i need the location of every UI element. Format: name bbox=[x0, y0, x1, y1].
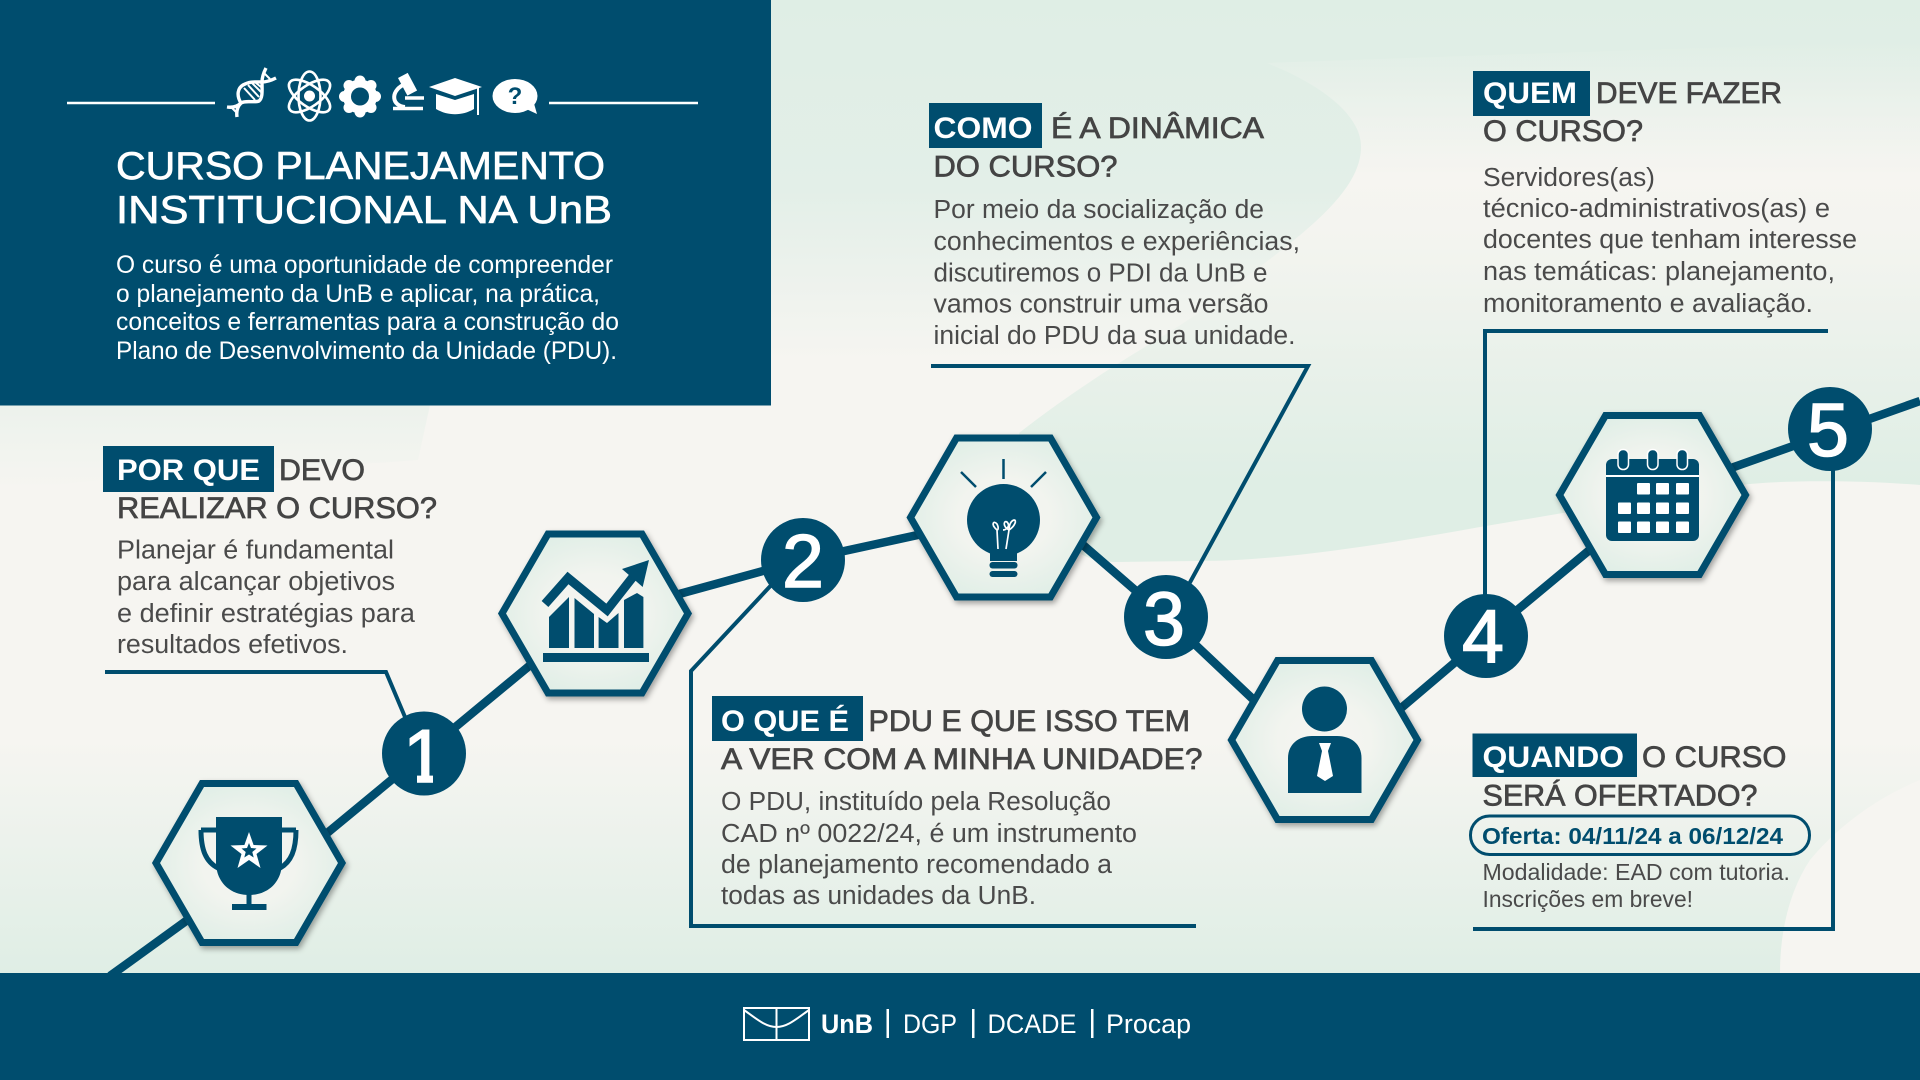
body: o que e: todas as unidades da UnB. bbox=[721, 882, 1036, 910]
connector: step 1 bbox=[105, 672, 405, 717]
body: quem bbox=[1483, 164, 1857, 318]
body: como: inicial do PDU da sua unidade. bbox=[934, 322, 1296, 350]
icon: dna bbox=[227, 68, 276, 117]
section: quem bbox=[1473, 71, 1857, 318]
heading: quem: O CURSO? bbox=[1483, 115, 1643, 148]
body: quem: nas temáticas: planejamento, bbox=[1483, 258, 1835, 286]
header rule left bbox=[67, 102, 215, 104]
icon: trophy bbox=[201, 817, 296, 910]
icon: microscope bbox=[393, 73, 424, 108]
number badge 1: 1 bbox=[403, 714, 445, 798]
body: quem: docentes que tenham interesse bbox=[1483, 226, 1857, 254]
icon: growth chart bbox=[543, 560, 649, 662]
header rule right bbox=[549, 102, 698, 104]
intro text: conceitos e ferramentas para a construção do bbox=[116, 308, 619, 336]
icon: gear bbox=[339, 76, 381, 118]
section: como bbox=[929, 103, 1300, 350]
icon: question bubble: ? bbox=[508, 83, 522, 110]
hexagon: trophy bbox=[156, 784, 342, 942]
body: como: discutiremos o PDI da UnB e bbox=[934, 260, 1268, 288]
date pill: Oferta: 04/11/24 a 06/12/24 bbox=[1482, 823, 1783, 849]
heading: quem bbox=[1473, 71, 1782, 148]
date pill bbox=[1470, 816, 1810, 854]
body: quando bbox=[1482, 859, 1790, 912]
footer text: Procap bbox=[1106, 1009, 1191, 1039]
connector: step 4 bbox=[1485, 331, 1828, 600]
heading: o que e: PDU E QUE ISSO TEM bbox=[868, 705, 1190, 738]
timeline path bbox=[110, 401, 1920, 976]
number badge 4 bbox=[1444, 594, 1528, 678]
number badge 4: 4 bbox=[1462, 594, 1504, 678]
connector: step 5 bbox=[1473, 470, 1833, 929]
hexagon: person bbox=[1232, 660, 1418, 820]
body: o que e: CAD nº 0022/24, é um instrumento bbox=[721, 820, 1137, 848]
number badge 2 bbox=[761, 518, 845, 603]
number badge 3: 3 bbox=[1143, 577, 1185, 661]
number badge 5: 5 bbox=[1807, 388, 1849, 472]
intro text bbox=[116, 251, 619, 365]
heading: quando: SERÁ OFERTADO? bbox=[1482, 780, 1758, 812]
heading: o que e: O QUE É bbox=[721, 704, 849, 738]
footer text: UnB bbox=[821, 1009, 873, 1039]
title: INSTITUCIONAL NA UnB bbox=[116, 189, 612, 232]
footer text: DGP bbox=[903, 1009, 957, 1039]
title: CURSO PLANEJAMENTO bbox=[116, 145, 605, 188]
body: por que: e definir estratégias para bbox=[117, 600, 416, 628]
body: como: conhecimentos e experiências, bbox=[934, 228, 1300, 256]
heading: quando bbox=[1472, 734, 1786, 812]
footer text: DCADE bbox=[988, 1009, 1076, 1039]
heading: por que bbox=[103, 446, 437, 525]
footer bbox=[0, 973, 1920, 1080]
body: como: Por meio da socialização de bbox=[934, 196, 1264, 224]
body: por que: resultados efetivos. bbox=[117, 631, 348, 659]
number badge 2: 2 bbox=[782, 519, 824, 603]
number badge 5 bbox=[1788, 387, 1872, 472]
body: quem: monitoramento e avaliação. bbox=[1483, 290, 1813, 318]
title bbox=[116, 145, 612, 232]
body: o que e: de planejamento recomendado a bbox=[721, 851, 1113, 879]
section: por que bbox=[103, 446, 437, 659]
body: quando: Inscrições em breve! bbox=[1482, 886, 1693, 912]
body: como bbox=[934, 196, 1300, 350]
hexagon: chart bbox=[502, 534, 688, 693]
heading: o que e: A VER COM A MINHA UNIDADE? bbox=[721, 743, 1202, 776]
body: por que: Planejar é fundamental bbox=[117, 536, 394, 564]
body: quando: Modalidade: EAD com tutoria. bbox=[1482, 859, 1790, 885]
body: por que bbox=[117, 536, 416, 659]
footer text bbox=[821, 1009, 1191, 1039]
connector: step 2 bbox=[691, 580, 1196, 926]
icon: graduation cap bbox=[429, 78, 482, 115]
heading: como: COMO bbox=[934, 112, 1032, 145]
heading: quando: O CURSO bbox=[1642, 741, 1786, 774]
heading: como bbox=[929, 103, 1264, 184]
icon: person bbox=[1288, 686, 1362, 793]
number badge 1 bbox=[382, 712, 466, 798]
heading: por que: DEVO bbox=[279, 454, 365, 487]
icon: UnB logo bbox=[744, 1008, 809, 1040]
icon: calendar bbox=[1606, 450, 1699, 541]
heading: por que: REALIZAR O CURSO? bbox=[117, 492, 437, 525]
body: o que e bbox=[721, 788, 1137, 910]
intro text: Plano de Desenvolvimento da Unidade (PDU). bbox=[116, 337, 617, 365]
body: quem: técnico-administrativos(as) e bbox=[1483, 195, 1830, 223]
hexagon: calendar bbox=[1560, 416, 1746, 574]
header panel bbox=[0, 0, 771, 406]
icon: question bubble bbox=[492, 79, 538, 114]
heading: como: É A DINÂMICA bbox=[1051, 112, 1264, 145]
connector: step 3 bbox=[931, 366, 1308, 586]
heading: o que e bbox=[712, 696, 1202, 776]
icon: atom bbox=[284, 72, 335, 120]
section: o que e bbox=[712, 696, 1202, 910]
heading: quem: QUEM bbox=[1483, 77, 1577, 110]
section: quando bbox=[1470, 734, 1810, 912]
heading: quem: DEVE FAZER bbox=[1596, 77, 1782, 110]
heading: por que: POR QUE bbox=[117, 454, 260, 487]
body: quem: Servidores(as) bbox=[1483, 164, 1655, 192]
icon: light bulb bbox=[961, 459, 1046, 577]
body: por que: para alcançar objetivos bbox=[117, 568, 395, 596]
hexagon: light bulb bbox=[910, 438, 1096, 597]
body: o que e: O PDU, instituído pela Resolução bbox=[721, 788, 1111, 816]
intro text: O curso é uma oportunidade de compreender bbox=[116, 251, 613, 279]
heading: quando: QUANDO bbox=[1482, 741, 1624, 774]
number badge 3 bbox=[1124, 575, 1208, 661]
heading: como: DO CURSO? bbox=[934, 150, 1118, 184]
intro text: o planejamento da UnB e aplicar, na prática, bbox=[116, 280, 600, 308]
body: como: vamos construir uma versão bbox=[934, 290, 1268, 318]
